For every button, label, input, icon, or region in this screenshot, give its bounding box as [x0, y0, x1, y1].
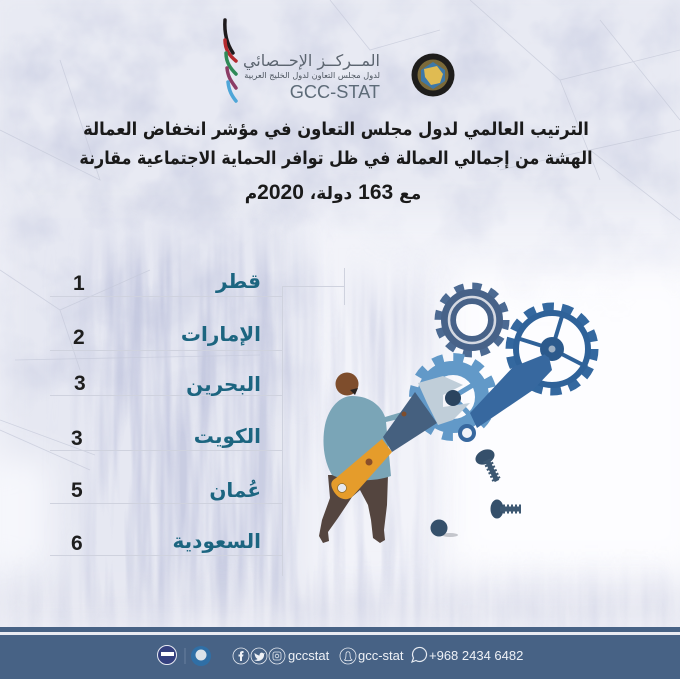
icon: GCC emblem [412, 54, 454, 96]
row: UAE: الإمارات [181, 322, 261, 346]
logo: GCC-STAT [223, 18, 454, 103]
footer handles text [288, 648, 523, 663]
icon: ball screw [430, 520, 458, 537]
logo subtitle arabic: لدول مجلس التعاون لدول الخليج العربية [244, 70, 380, 80]
row: Bahrain: البحرين [186, 372, 261, 396]
footer top stripes [0, 632, 680, 635]
ranking list [71, 269, 261, 555]
title [79, 119, 593, 204]
figure: head [336, 372, 358, 396]
row: Saudi Arabia: السعودية [173, 529, 261, 553]
rank 1: 1 [73, 272, 85, 295]
rank 3 second: 3 [71, 427, 83, 450]
footer band [0, 627, 680, 679]
figure: legs [319, 475, 388, 543]
title line 3: مع 163 دولة، 2020م [245, 181, 421, 204]
title line 2: الهشة من إجمالي العمالة في ظل توافر الحماية الاجتماعية مقارنة [79, 148, 593, 169]
icon: wrench [331, 376, 470, 499]
row: Kuwait: الكويت [194, 424, 261, 448]
icon: facebook and twitter glyphs [238, 651, 265, 661]
row: Qatar: قطر [216, 269, 261, 293]
rank 2: 2 [73, 326, 85, 349]
phone number: +968 2434 6482 [429, 648, 523, 663]
icon: blue spanner arm [460, 340, 561, 440]
figure: body [323, 396, 403, 480]
row: Oman: عُمان [209, 478, 261, 502]
rank 5: 5 [71, 479, 83, 502]
icon: light blue gear [414, 358, 492, 436]
logo name arabic: المــركــز الإحــصائي [243, 51, 380, 71]
icon: dark gear [439, 287, 505, 353]
icon: large blue gear [510, 307, 594, 391]
title line 1: الترتيب العالمي لدول مجلس التعاون في مؤشر انخفاض العمالة [83, 119, 589, 140]
handle gcc-stat: gcc-stat [358, 648, 404, 663]
icon: screw 2 [490, 500, 521, 518]
rank 6: 6 [71, 532, 83, 555]
icon: screw 1 [473, 446, 497, 481]
icon: TUV badge [185, 646, 211, 666]
rank 3: 3 [74, 372, 86, 395]
handle gccstat: gccstat [288, 648, 329, 663]
icon: social circles [233, 647, 427, 664]
logo latin name: GCC-STAT [290, 82, 380, 102]
icon: quality badge [158, 646, 176, 664]
icon: logo ribbons [225, 20, 236, 101]
